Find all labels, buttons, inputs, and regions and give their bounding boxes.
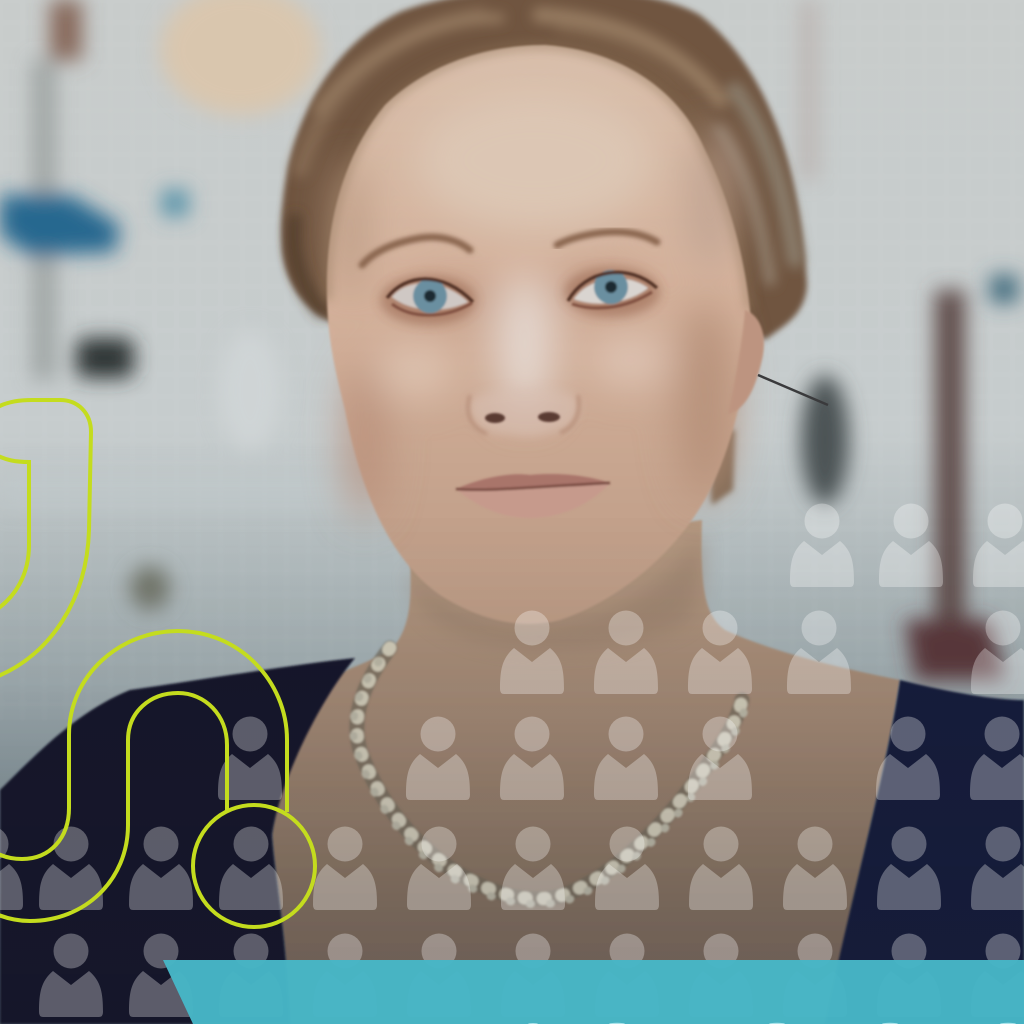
photo: right eyebrow [557, 232, 657, 245]
photo: lips [456, 474, 610, 518]
photo: navy dress [0, 658, 1024, 1024]
people row 5 [39, 934, 1024, 1017]
people row 3 [218, 716, 1024, 800]
photo: necklace [353, 648, 746, 904]
photo: chest and neck [272, 520, 900, 1024]
photo: hair tail behind neck [711, 430, 735, 505]
photo: left eyebrow [362, 237, 470, 265]
photo: right eye [564, 267, 660, 317]
photo: hair strands [294, 15, 795, 310]
photo: neck shadow [410, 530, 702, 648]
photo: stray hair strand [758, 375, 828, 405]
lime outline: upper left shape [0, 400, 91, 677]
photo: ear [728, 310, 764, 414]
lime outline: winding line [0, 631, 287, 921]
people row 4 [0, 826, 1024, 910]
people row 1 [790, 504, 1024, 587]
teal banner [163, 960, 1024, 1024]
lime circle around icon [193, 805, 315, 927]
photo: hair back [281, 0, 807, 340]
photo: face [327, 45, 750, 624]
photo: left eye [380, 275, 476, 325]
photo: nose [468, 388, 579, 436]
people row 2 [500, 610, 1024, 694]
cropped white letter tops [528, 1023, 1016, 1024]
people icon grid [0, 504, 1024, 1017]
photo: hairline [327, 45, 750, 310]
